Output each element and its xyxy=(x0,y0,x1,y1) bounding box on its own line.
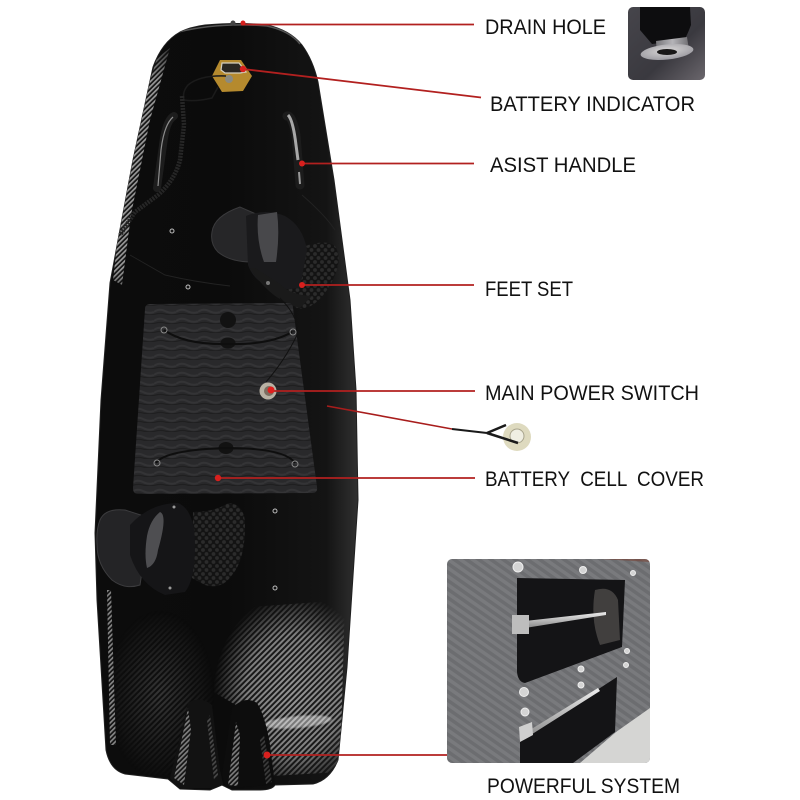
fin: right xyxy=(222,700,275,788)
callout: lanyard line xyxy=(327,406,452,429)
label: battery cell cover: BATTERY CELL COVER xyxy=(485,468,704,491)
power switch lanyard wire xyxy=(266,298,297,382)
carbon area: tail left xyxy=(116,628,204,762)
carbon strip: left rail xyxy=(113,48,170,285)
battery indicator hexagon xyxy=(212,60,252,92)
rear foot binding xyxy=(97,503,245,595)
label: drain hole xyxy=(240,16,606,39)
handle: right xyxy=(287,115,300,185)
inset photo: drain hole detail xyxy=(628,7,705,80)
deck traction pad xyxy=(133,303,317,494)
jet board xyxy=(95,20,358,790)
jet tunnel: upper xyxy=(517,578,625,683)
wires and coiled lanyard xyxy=(120,76,335,286)
label: main power switch: MAIN POWER SWITCH xyxy=(485,382,699,405)
inset: safety lanyard xyxy=(452,423,531,451)
carbon area: tail right xyxy=(210,600,345,776)
label: main power switch xyxy=(268,382,699,405)
handle: left xyxy=(157,116,174,188)
fin: left xyxy=(177,700,223,788)
label: assist handle xyxy=(299,154,636,177)
highlight: tail glare xyxy=(265,714,332,730)
label: battery cell cover xyxy=(215,468,704,491)
label line: powerful system xyxy=(264,752,448,758)
label: battery indicator xyxy=(240,66,695,116)
carbon strip: tail left rail xyxy=(107,590,116,745)
inset photo: powerful system xyxy=(447,559,650,763)
drain plug xyxy=(230,20,236,26)
label: assist handle: ASIST HANDLE xyxy=(490,154,636,177)
front foot binding xyxy=(212,207,339,309)
label: feet set: FEET SET xyxy=(485,278,573,301)
label: powerful system: POWERFUL SYSTEM xyxy=(487,775,680,798)
jet tunnel: lower xyxy=(520,677,617,763)
mounting screws xyxy=(170,229,277,590)
mounting bolts xyxy=(513,562,636,716)
carbon strip: top rim xyxy=(178,25,300,44)
main power switch button xyxy=(260,382,276,400)
label: drain hole: DRAIN HOLE xyxy=(485,16,606,39)
label: battery indicator: BATTERY INDICATOR xyxy=(490,93,695,116)
label: feet set xyxy=(299,278,573,301)
